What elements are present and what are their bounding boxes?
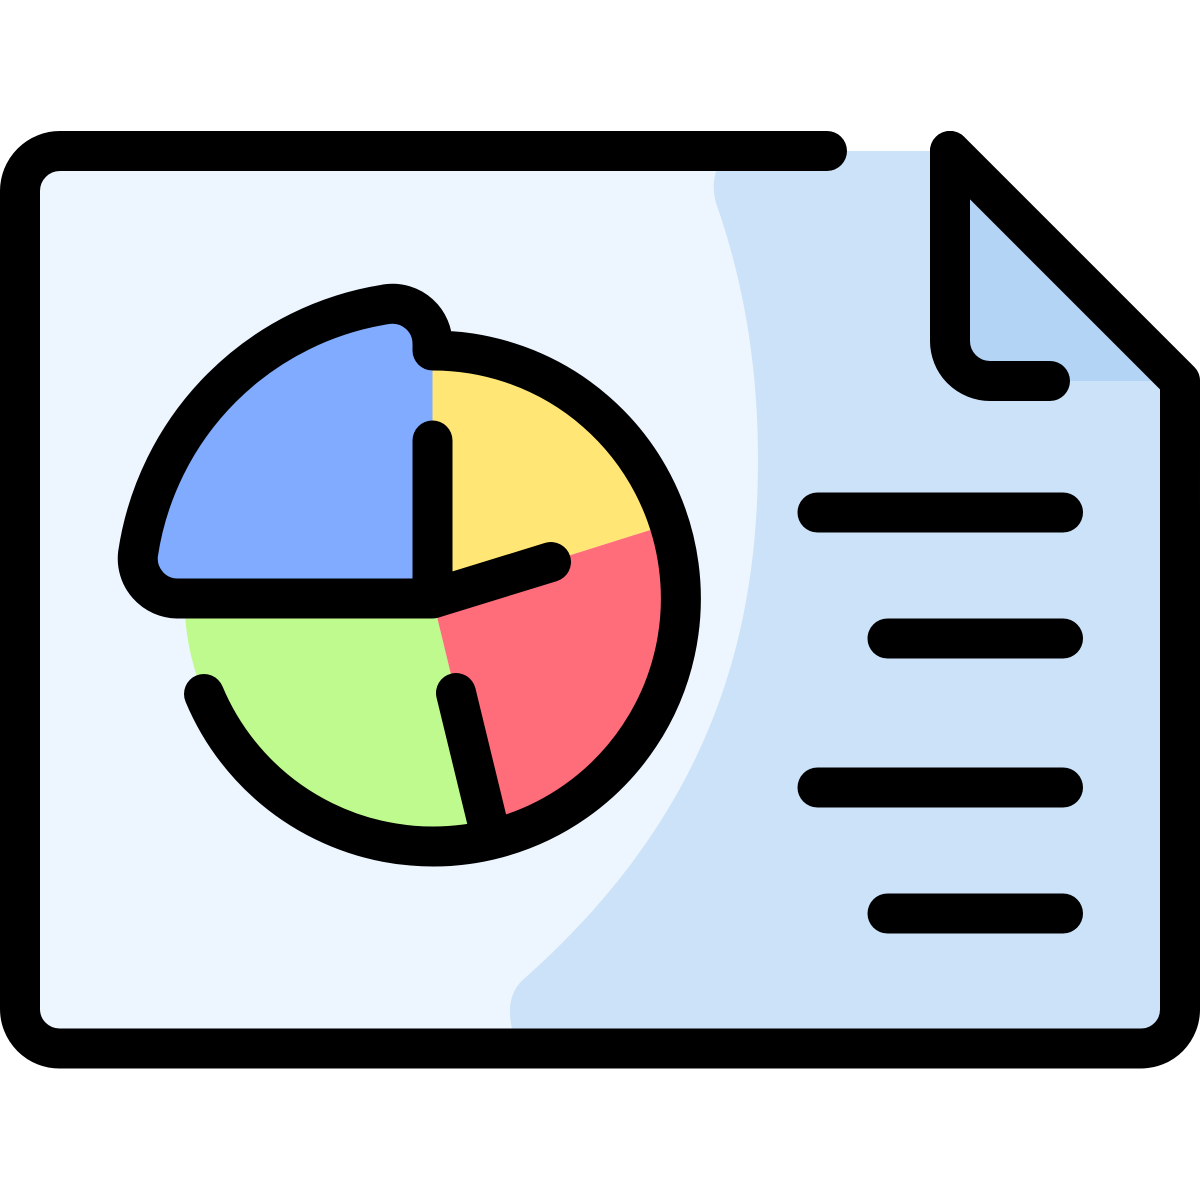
- pie slice: green: [184, 598, 491, 847]
- pie slice: yellow: [432, 350, 660, 598]
- text line 1: [818, 492, 1063, 532]
- chart: pie chart: [138, 304, 671, 847]
- pie outer arc: [138, 304, 681, 846]
- pie divider: lower: [456, 693, 490, 835]
- panel: document page: [20, 151, 1180, 1048]
- pie divider: vertical: [412, 440, 452, 598]
- pie slice: red: [432, 527, 671, 840]
- icon: folded corner: [950, 151, 1180, 381]
- fold outline: [950, 151, 1050, 381]
- text line 4: [888, 894, 1063, 934]
- document outline: [20, 151, 1180, 1048]
- text line 2: [888, 618, 1063, 658]
- text line 3: [818, 768, 1063, 808]
- pie slice: blue: [138, 304, 433, 598]
